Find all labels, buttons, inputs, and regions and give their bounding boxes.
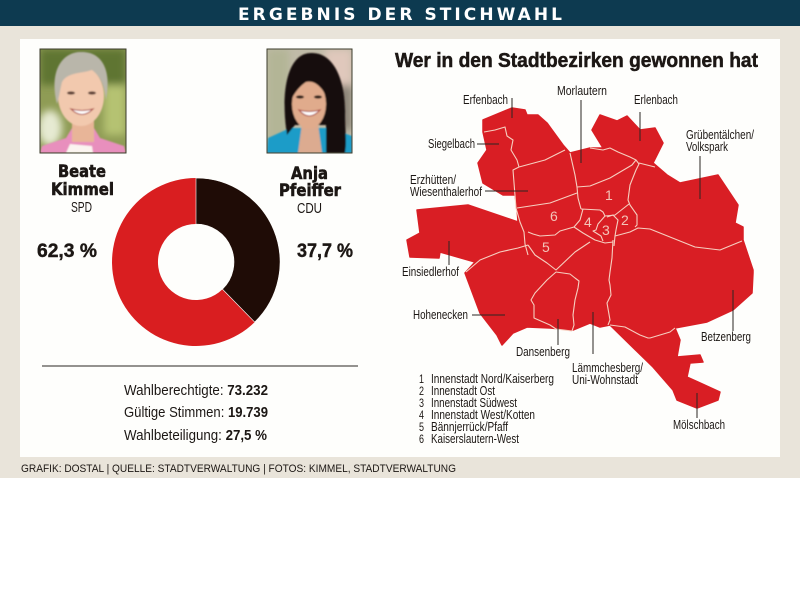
- result: Pfeiffer percentage: 37,7 %: [297, 241, 353, 262]
- result: Kimmel percentage: 62,3 %: [37, 241, 97, 262]
- candidate: Beate Kimmel: Kimmel: [51, 180, 114, 200]
- candidate: Anja Pfeiffer: Pfeiffer: [279, 181, 342, 201]
- map labels: Morlautern: [557, 83, 607, 98]
- map legend: 6: [419, 432, 424, 446]
- donut segment: Kimmel 62.3 %: [112, 178, 255, 346]
- map labels: Volkspark: [686, 139, 728, 154]
- statistics block: Wahlbeteiligung: 27,5 %: [124, 427, 267, 444]
- photo: Beate Kimmel: [38, 49, 126, 153]
- map: district area: [407, 108, 753, 408]
- map labels: Erlenbach: [634, 92, 678, 107]
- map labels: Betzenberg: [701, 329, 751, 344]
- map title: Wer in den Stadtbezirken gewonnen hat: [395, 50, 758, 72]
- map labels: Dansenberg: [516, 344, 570, 359]
- map legend: 5: [419, 420, 424, 434]
- candidate: Beate Kimmel: SPD: [71, 199, 92, 216]
- map legend: 1: [419, 372, 424, 386]
- map legend: 2: [419, 384, 424, 398]
- map legend: Innenstadt Ost: [431, 383, 495, 398]
- statistics block: Gültige Stimmen: 19.739: [124, 404, 268, 421]
- candidate: Beate Kimmel: Beate: [58, 162, 106, 182]
- map labels: Siegelbach: [428, 136, 475, 151]
- map legend: Innenstadt West/Kotten: [431, 407, 535, 422]
- map legend: Innenstadt Südwest: [431, 395, 517, 410]
- map: district numbers: [542, 187, 629, 255]
- map labels: Lämmchesberg/: [572, 360, 643, 375]
- donut chart: [112, 178, 280, 346]
- map labels: [402, 83, 754, 432]
- map legend: Kaiserslautern-West: [431, 431, 519, 446]
- map: district numbers: 6: [550, 208, 558, 224]
- map labels: Erzhütten/: [410, 172, 456, 187]
- map legend: [419, 371, 554, 446]
- photo frame: Anja Pfeiffer: [267, 49, 352, 153]
- header bar: ERGEBNIS DER STICHWAHL: [238, 5, 562, 25]
- candidate: Anja Pfeiffer: [279, 164, 342, 217]
- map labels: Einsiedlerhof: [402, 264, 459, 279]
- background frame: [0, 0, 800, 478]
- map legend: Bännjerrück/Pfaff: [431, 419, 508, 434]
- map leader lines: [449, 98, 733, 418]
- district map: [407, 108, 753, 408]
- map: district borders: [466, 127, 742, 338]
- map legend: Innenstadt Nord/Kaiserberg: [431, 371, 554, 386]
- map: district numbers: 3: [602, 222, 610, 238]
- map legend: 4: [419, 408, 424, 422]
- map: district numbers: 1: [605, 187, 613, 203]
- map: district numbers: 2: [621, 212, 629, 228]
- source credit: GRAFIK: DOSTAL | QUELLE: STADTVERWALTUNG | FOTOS: KIMMEL, STADTVERWALTUNG: [21, 463, 456, 475]
- candidate: Anja Pfeiffer: CDU: [297, 200, 322, 217]
- map labels: Wiesenthalerhof: [410, 184, 482, 199]
- map labels: Uni-Wohnstadt: [572, 372, 638, 387]
- map labels: Hohenecken: [413, 307, 468, 322]
- candidate: Beate Kimmel: [51, 162, 114, 216]
- map legend: 3: [419, 396, 424, 410]
- header bar: [0, 0, 800, 26]
- white content panel: [20, 39, 780, 457]
- map: district numbers: 4: [584, 214, 592, 230]
- statistics block: Wahlberechtigte: 73.232: [124, 382, 268, 399]
- photo: Anja Pfeiffer: [267, 49, 352, 153]
- map labels: Grübentälchen/: [686, 127, 754, 142]
- map: district numbers: 5: [542, 239, 550, 255]
- map labels: Mölschbach: [673, 417, 725, 432]
- map labels: Erfenbach: [463, 92, 508, 107]
- photo frame: Beate Kimmel: [40, 49, 126, 153]
- donut segment: Pfeiffer 37.7 %: [196, 178, 280, 322]
- candidate: Anja Pfeiffer: Anja: [291, 164, 328, 184]
- statistics block: [42, 366, 358, 444]
